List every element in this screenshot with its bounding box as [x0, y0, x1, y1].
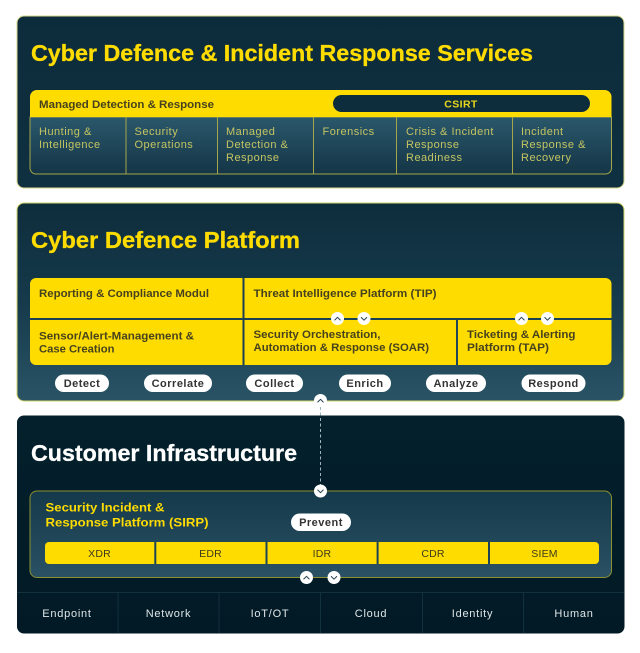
heading: services: Cyber Defence & Incident Response Services	[31, 40, 533, 66]
cell: Crisis & Incident Response Readiness: Readiness	[406, 152, 462, 164]
pill: Analyze	[426, 374, 486, 392]
pill: Analyze: Analyze	[433, 378, 479, 390]
pill: Prevent: Prevent	[299, 517, 343, 529]
cell: Incident Response & Recovery: Recovery	[521, 152, 571, 164]
module: Reporting: Reporting & Compliance Modul	[39, 288, 209, 300]
tool chips: EDR	[199, 548, 222, 560]
cell: Managed Detection & Response: Detection &	[226, 139, 289, 151]
icon: up arrow, SOAR	[331, 312, 344, 325]
pill: Respond	[522, 374, 586, 392]
bottom asset row: IoT/OT	[251, 608, 289, 620]
heading: customer infrastructure: Customer Infrastructure	[31, 440, 297, 466]
icon: down arrow, SIRP bottom	[328, 571, 340, 584]
pill: Correlate	[144, 374, 212, 392]
icon: down arrow, SIRP top	[314, 484, 327, 498]
cell: Incident Response & Recovery: Incident	[521, 126, 564, 138]
pill: Enrich	[339, 374, 391, 392]
cell: Forensics: Forensics	[322, 126, 375, 138]
cell: Security Operations: Security	[134, 126, 178, 138]
pill: Respond: Respond	[528, 378, 579, 390]
module: TAP: Ticketing & Alerting	[467, 329, 576, 341]
pill: Collect	[246, 374, 303, 392]
pill: Correlate: Correlate	[152, 378, 204, 390]
icon: up arrow, TAP	[515, 312, 528, 325]
heading: platform: Cyber Defence Platform	[31, 227, 300, 253]
bottom asset row	[17, 592, 624, 633]
cell: Crisis & Incident Response Readiness: Crisis & Incident	[406, 126, 494, 138]
bottom asset row: Identity	[452, 608, 493, 620]
module: TIP: Threat Intelligence Platform (TIP)	[254, 288, 437, 300]
cell: Crisis & Incident Response Readiness: Response	[406, 139, 460, 151]
SIRP label: Security Incident &	[46, 502, 164, 514]
SIRP label: Response Platform (SIRP)	[46, 518, 209, 530]
services table	[30, 90, 612, 174]
module: Sensor/Alert: Case Creation	[39, 344, 115, 356]
bottom asset row: Endpoint	[42, 608, 92, 620]
header label: Managed Detection & Response	[39, 99, 214, 111]
cell: Managed Detection & Response: Response	[226, 152, 280, 164]
module: TAP: Platform (TAP)	[467, 342, 549, 354]
pill: Enrich: Enrich	[346, 378, 384, 390]
cell: Hunting & Intelligence: Intelligence	[39, 139, 101, 151]
panel: Cyber Defence Platform	[17, 203, 624, 401]
tool chips	[45, 542, 599, 564]
tool chips: XDR	[88, 548, 111, 560]
tool chips: SIEM	[531, 548, 558, 560]
icon: up arrow, SIRP bottom	[300, 571, 313, 584]
panel: Customer Infrastructure	[17, 416, 624, 634]
cell: Security Operations: Operations	[134, 139, 193, 151]
pill: Detect: Detect	[64, 378, 100, 390]
yellow header bar	[30, 90, 612, 117]
SIRP box	[30, 491, 612, 578]
module: Sensor/Alert: Sensor/Alert-Management &	[39, 330, 194, 342]
bottom asset row: Human	[554, 608, 594, 620]
module: SOAR: Security Orchestration,	[254, 329, 380, 341]
CSIRT pill: CSIRT	[444, 98, 478, 110]
icon: down arrow, TAP	[541, 312, 554, 325]
panel: Cyber Defence & Incident Response Services	[17, 16, 624, 188]
bottom asset row: Cloud	[355, 608, 387, 620]
icon: down arrow, SOAR	[358, 312, 370, 325]
pill: Detect	[55, 374, 109, 392]
arrow: dashed link between platform and infrastructure	[320, 407, 322, 485]
tool chips: IDR	[313, 548, 332, 560]
module: SOAR: Automation & Response (SOAR)	[254, 342, 429, 354]
pill: Collect: Collect	[254, 378, 295, 390]
tool chips: CDR	[421, 548, 445, 560]
CSIRT pill	[333, 95, 590, 112]
bottom asset row: Network	[146, 608, 191, 620]
pill: Prevent	[291, 514, 351, 531]
cell: Incident Response & Recovery: Response &	[521, 139, 586, 151]
platform modules	[30, 278, 612, 365]
cell: Hunting & Intelligence: Hunting &	[39, 126, 92, 138]
icon: up arrow, platform bottom	[314, 394, 327, 407]
cell: Managed Detection & Response: Managed	[226, 126, 275, 138]
